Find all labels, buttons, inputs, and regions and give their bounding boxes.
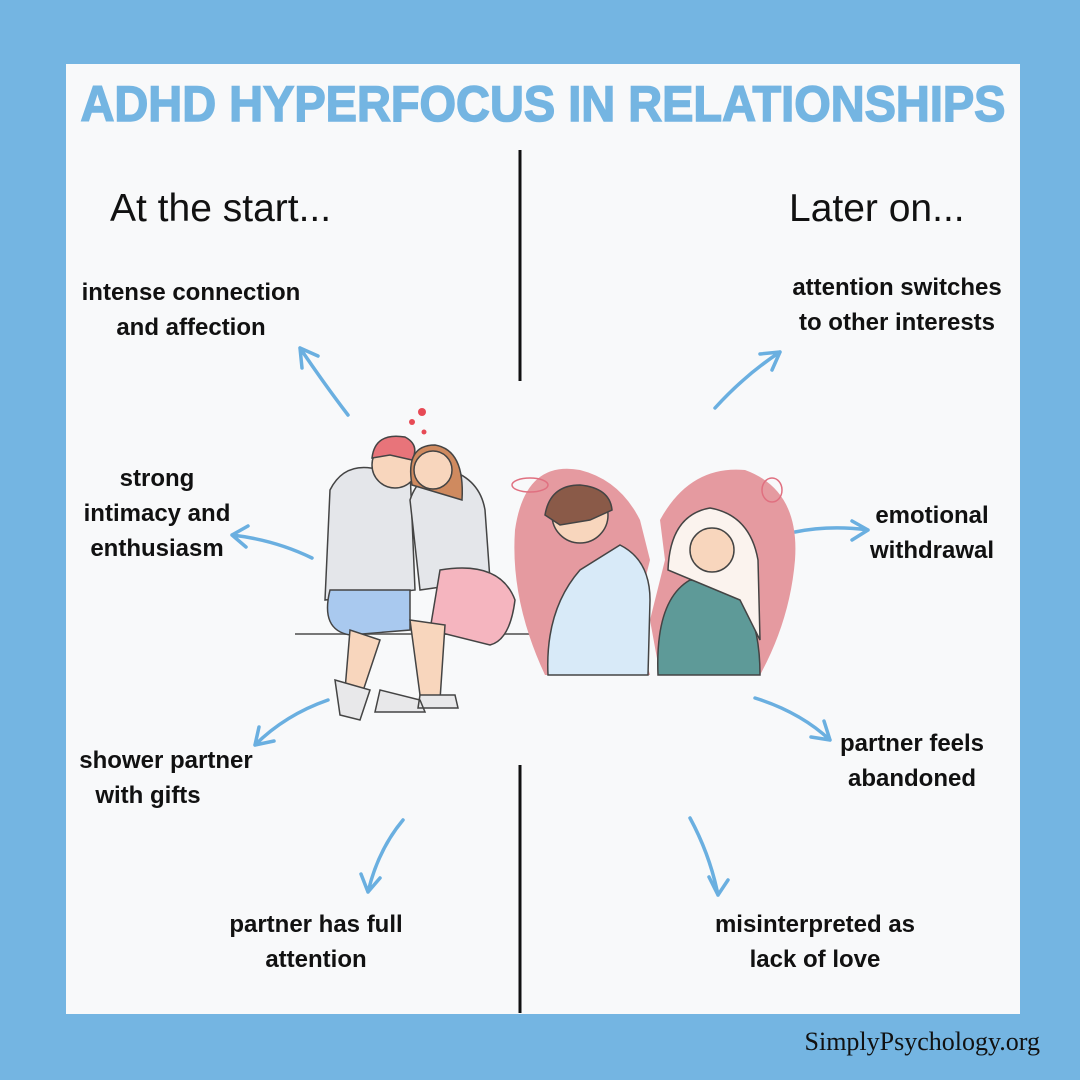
illustration: happy couple [295,436,540,720]
label: emotional withdrawal: withdrawal [869,537,994,564]
heading: later on: Later on... [789,187,965,230]
label: partner feels abandoned: partner feels [840,730,984,757]
label: intense connection: intense connection [82,279,300,306]
icon: hearts [409,408,426,434]
label: emotional withdrawal: emotional [875,502,989,529]
label: strong intimacy: enthusiasm [90,535,224,562]
footer: source: SimplyPsychology.org [805,1027,1040,1056]
label: partner feels abandoned: abandoned [848,765,976,792]
label: attention switches: to other interests [799,309,995,336]
heading: at the start: At the start... [110,187,331,230]
label: shower partner: with gifts [94,782,201,809]
label: partner has full attention: attention [265,946,367,973]
label: partner has full attention: partner has full [229,911,403,938]
panel: main white card [66,64,1020,1014]
label: shower partner: shower partner [79,747,253,774]
label: strong intimacy: strong [120,465,194,492]
illustration: broken heart sad couple [512,469,795,675]
title: ADHD HYPERFOCUS IN RELATIONSHIPS [80,76,1006,132]
label: strong intimacy: intimacy and [84,500,230,527]
label: misinterpreted: lack of love [750,946,880,973]
label: attention switches: attention switches [792,274,1002,301]
label: misinterpreted: misinterpreted as [715,911,915,938]
arrows [232,348,868,895]
label: intense connection: and affection [116,314,266,341]
